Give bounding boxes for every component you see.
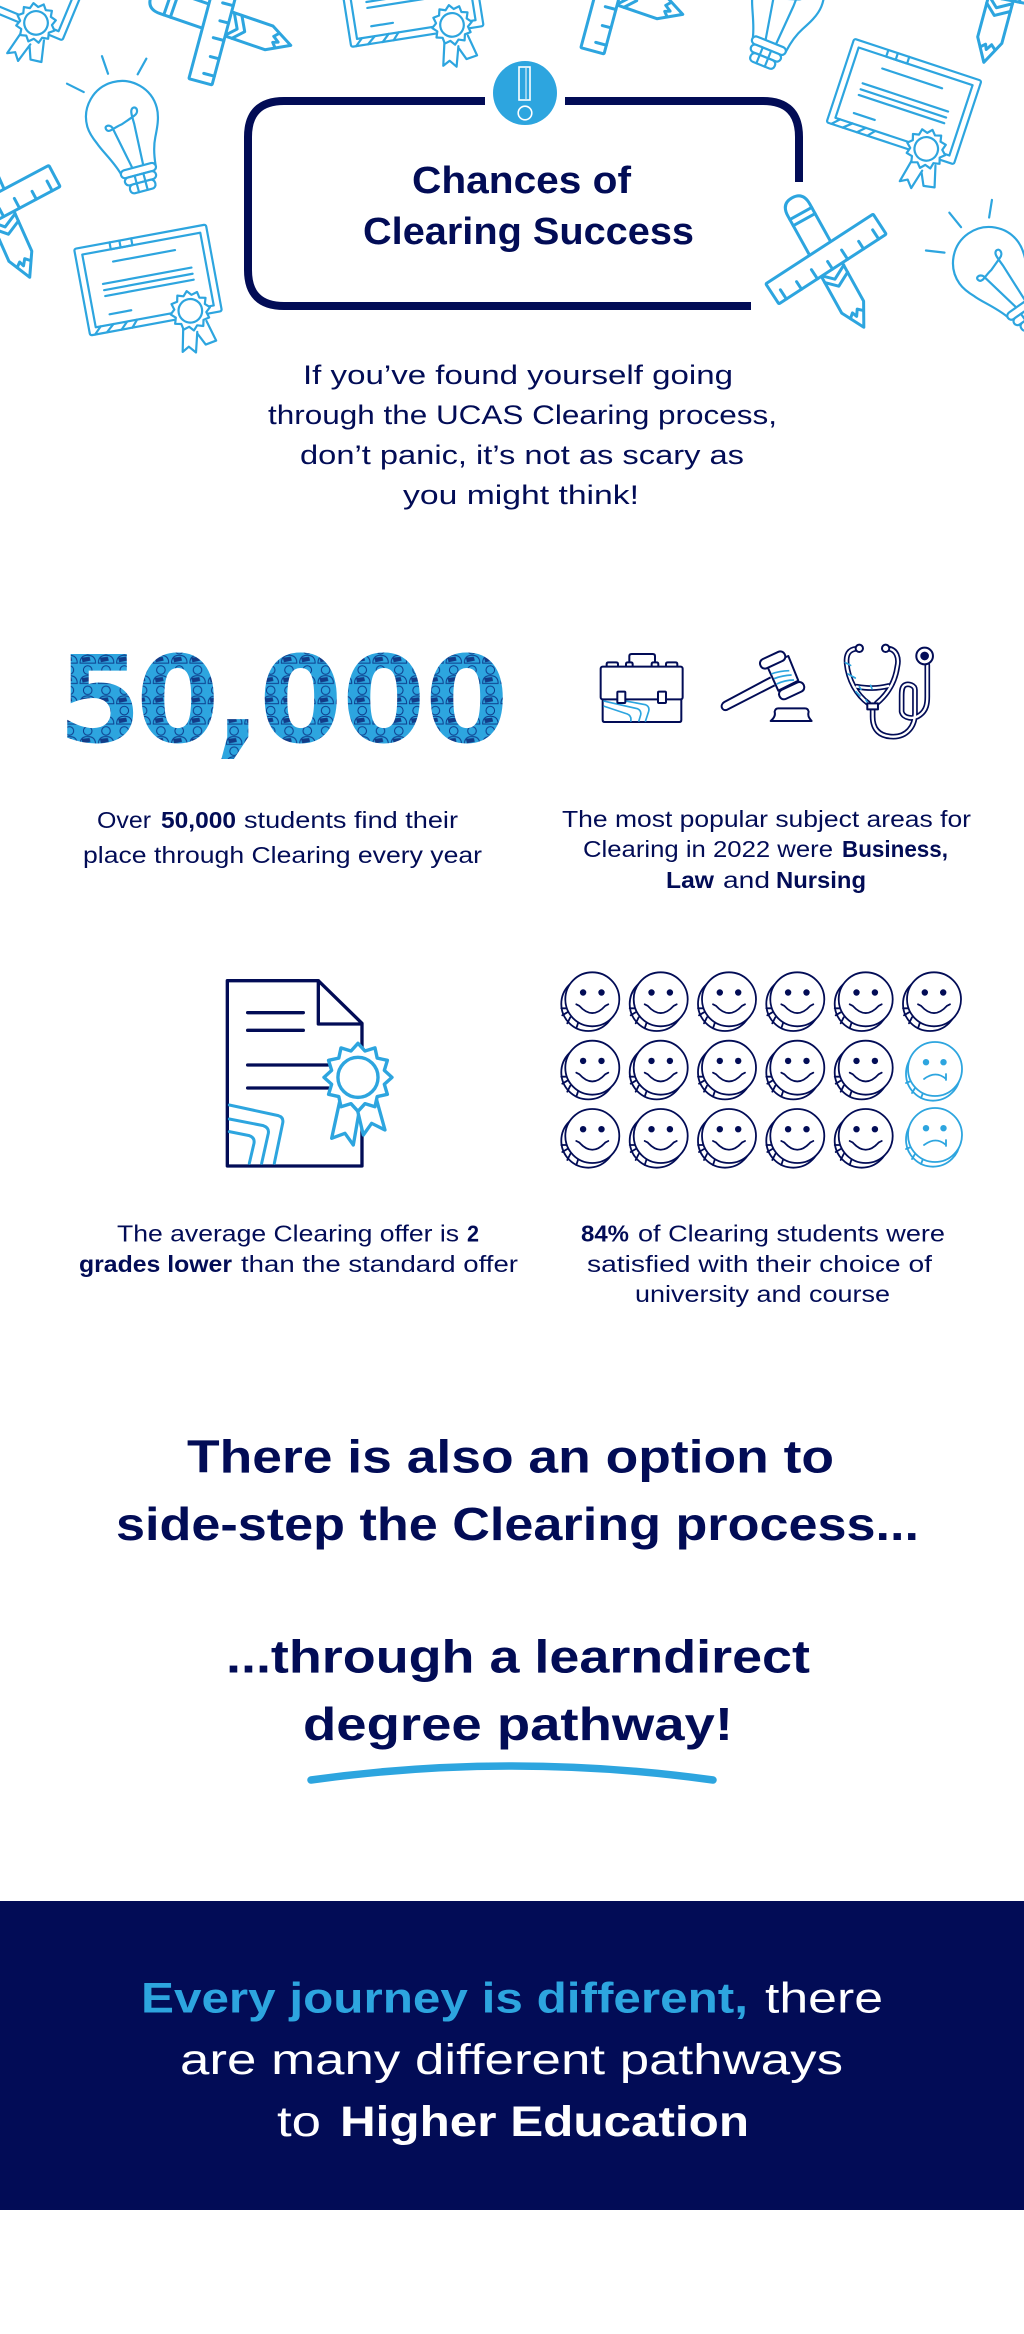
icon: certificate top centre <box>337 0 489 82</box>
icon: gavel <box>722 650 812 721</box>
icon: light bulb right <box>916 188 1024 352</box>
intro text: you might think! <box>403 480 639 510</box>
footer text: there <box>765 1975 883 2023</box>
caption: 84% satisfied <box>581 1221 945 1307</box>
icon: pencil and ruler left <box>0 116 89 304</box>
footer band <box>0 1901 1024 2210</box>
title: Chances of <box>412 160 631 202</box>
caption: 50,000 students: students find their <box>244 807 458 833</box>
caption: 50,000 students <box>83 807 482 868</box>
icon: pencil and ruler top centre <box>522 0 704 76</box>
intro text: through the UCAS Clearing process, <box>268 400 777 430</box>
caption: 50,000 students: 50,000 <box>161 807 236 833</box>
heading: degree pathway: degree pathway! <box>303 1698 733 1750</box>
caption: popular subjects: Nursing <box>776 867 866 893</box>
icon: exclamation badge <box>493 61 557 125</box>
intro text: If you’ve found yourself going <box>303 360 733 390</box>
caption: 84% satisfied: satisfied with their choice of <box>587 1251 933 1277</box>
caption: popular subjects <box>562 806 971 893</box>
title frame <box>248 101 799 306</box>
caption: popular subjects: Business, <box>842 836 948 862</box>
caption: popular subjects: Clearing in 2022 were <box>583 836 833 862</box>
caption: popular subjects: The most popular subject areas for <box>562 806 971 832</box>
icon: graded document with rosette <box>227 981 392 1166</box>
underline swoosh <box>311 1766 713 1780</box>
icon: certificate left <box>74 225 228 371</box>
title: Clearing Success <box>363 211 694 253</box>
footer text: Every journey is different, <box>141 1975 748 2023</box>
footer text: are many different pathways <box>180 2036 843 2084</box>
caption: 50,000 students: place through Clearing every year <box>83 842 482 868</box>
big number 50,000 patterned with students: 50,000 <box>58 632 508 771</box>
intro text <box>268 360 777 510</box>
icon: pencil and ruler top left <box>130 0 312 107</box>
heading: side-step option: side-step the Clearing process... <box>116 1498 919 1550</box>
caption: two grades lower: grades lower <box>79 1251 232 1277</box>
caption: popular subjects: Law <box>666 867 714 893</box>
icon: certificate right <box>815 39 981 198</box>
icon: light bulb top right <box>718 0 848 79</box>
caption: 84% satisfied: 84% <box>581 1221 629 1247</box>
icon: stethoscope <box>845 645 933 737</box>
footer text: to <box>277 2098 321 2146</box>
caption: popular subjects: and <box>723 867 770 893</box>
title <box>363 160 694 253</box>
smiley grid: 16 happy faces, 2 sad faces <box>561 972 962 1168</box>
icon: light bulb left <box>62 45 179 203</box>
heading: degree pathway: ...through a learndirect <box>226 1631 810 1683</box>
heading: side-step option: There is also an option to <box>187 1431 834 1483</box>
footer text: Higher Education <box>340 2098 749 2146</box>
caption: two grades lower <box>79 1221 518 1277</box>
icon: pencil and ruler right <box>735 166 920 359</box>
caption: 50,000 students: Over <box>97 807 151 833</box>
intro text: don’t panic, it’s not as scary as <box>300 440 744 470</box>
icon: briefcase <box>601 654 683 722</box>
caption: 84% satisfied: university and course <box>635 1281 890 1307</box>
caption: two grades lower: than the standard offer <box>241 1251 518 1277</box>
footer text <box>141 1975 883 2146</box>
icon: pencil and ruler top right <box>921 0 1024 79</box>
caption: two grades lower: The average Clearing offer is <box>117 1221 459 1247</box>
background doodles: certificates, bulbs, pencils and rulers <box>0 0 1024 371</box>
caption: 84% satisfied: of Clearing students were <box>638 1221 945 1247</box>
heading: side-step option <box>116 1431 919 1550</box>
heading: degree pathway <box>226 1631 810 1750</box>
icon: certificate top left <box>0 0 96 74</box>
caption: two grades lower: 2 <box>467 1221 479 1247</box>
